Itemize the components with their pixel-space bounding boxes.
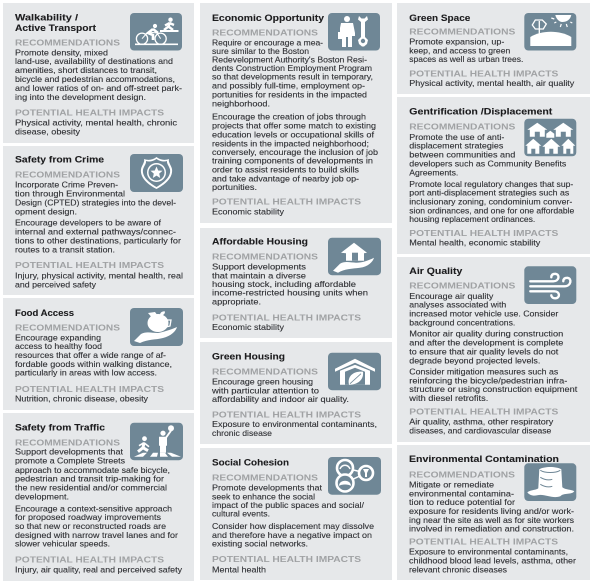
heading: green housing: Green Housing (212, 351, 285, 362)
recommendations text (15, 332, 172, 378)
recommendations text: portunities. (212, 182, 257, 192)
potential health impacts label: POTENTIAL HEALTH IMPACTS (409, 408, 558, 417)
panel: gentrification / displacement (397, 97, 590, 254)
heading: food access: Food Access (15, 308, 74, 319)
recommendations text (212, 37, 378, 192)
recommendations text: spaces as well as urban trees. (409, 54, 523, 64)
recommendations text (15, 179, 181, 254)
recommendations text: Consider how displacement may dissolve (212, 521, 374, 531)
recommendations text: projects that offer some match to existing (212, 120, 376, 130)
recommendations text: displacement strategies (409, 141, 503, 151)
recommendations text: involved in remediation and construction. (409, 524, 574, 534)
recommendations text: tions to other destinations, particularly for (15, 236, 181, 246)
impacts text: childhood blood lead levels, asthma, other (409, 555, 576, 565)
recommendations text: Redevelopment Authority's Boston Resi- (212, 54, 367, 64)
icon: police badge (130, 154, 183, 192)
recommendations label: RECOMMENDATIONS (409, 282, 515, 291)
recommendations text: amenities, short distances to transit, (15, 65, 157, 75)
recommendations label: RECOMMENDATIONS (409, 123, 515, 132)
recommendations text: structure or using construction equipment (409, 384, 578, 394)
panel: safety from crime (3, 146, 194, 295)
recommendations label: RECOMMENDATIONS (15, 39, 120, 48)
recommendations text (212, 261, 368, 307)
recommendations text: Promote developments that (212, 483, 323, 493)
icon: cluster of houses (524, 119, 576, 156)
recommendations text: ing into the development design. (15, 92, 146, 102)
recommendations text: education levels or occupational skills of (212, 129, 375, 139)
heading: gentrification / displacement: Gentrification /Displacement (409, 107, 553, 118)
recommendations text: Encourage the creation of jobs through (212, 111, 366, 121)
panel: food access (3, 298, 194, 410)
potential health impacts label: POTENTIAL HEALTH IMPACTS (409, 229, 558, 238)
recommendations text: residents in the impacted neighborhood; (212, 138, 369, 148)
impacts text: relevant chronic diseases (409, 564, 507, 574)
recommendations text: Encourage air quality (409, 291, 494, 301)
recommendations text: environmental contamina- (409, 488, 514, 498)
recommendations label: RECOMMENDATIONS (15, 324, 120, 333)
recommendations text: Design (CPTED) strategies into the devel- (15, 197, 176, 207)
recommendations text: existing social networks. (212, 539, 308, 549)
impacts text: Mental health (212, 564, 266, 574)
impacts text: Air quality, asthma, other respiratory (409, 417, 554, 427)
recommendations text: to ensure that air quality levels do not (409, 347, 559, 357)
recommendations text: tion to reduce potential for (409, 497, 515, 507)
heading: walkability (15, 12, 97, 34)
recommendations text: Promote local regulatory changes that sup- (409, 179, 574, 189)
recommendations label: RECOMMENDATIONS (15, 438, 120, 447)
recommendations text: resources that offer a wide range of af- (15, 350, 166, 360)
recommendations text: with particular attention to (211, 385, 319, 395)
impacts text: Exposure to environmental contaminants, (409, 546, 568, 556)
recommendations text: Require or encourage a mea- (212, 37, 323, 47)
recommendations text: Support developments that (15, 447, 124, 457)
potential health impacts label: POTENTIAL HEALTH IMPACTS (409, 69, 558, 78)
potential health impacts label: POTENTIAL HEALTH IMPACTS (15, 555, 164, 564)
recommendations text: degrade beyond projected levels. (409, 355, 540, 365)
heading: air quality: Air Quality (409, 266, 463, 277)
recommendations text: dents Construction Employment Program (212, 63, 372, 73)
impacts text: Exposure to environmental contaminants, (212, 419, 377, 429)
potential health impacts label: POTENTIAL HEALTH IMPACTS (15, 261, 164, 270)
recommendations text: reinforcing the bicycle/pedestrian infra- (409, 375, 568, 385)
impacts text: Economic stability (212, 322, 285, 332)
panel: walkability / active transport (3, 3, 194, 143)
recommendations text: routes to a transit station. (15, 244, 115, 254)
panel: air quality (397, 257, 590, 442)
impacts text: Economic stability (212, 206, 285, 216)
recommendations text (409, 132, 575, 224)
recommendations text: background concentrations. (409, 317, 515, 327)
recommendations text: so that developments result in temporary, (212, 72, 373, 82)
icon: cyclist and pedestrian (130, 13, 182, 50)
recommendations text: seek to enhance the social (212, 491, 315, 501)
potential health impacts label: POTENTIAL HEALTH IMPACTS (212, 313, 361, 322)
icon: wind (524, 266, 576, 304)
recommendations text: and possibly full-time, employment op- (212, 81, 365, 91)
recommendations text: conversely, encourage the inclusion of job (212, 147, 378, 157)
panel: green space (397, 3, 590, 94)
recommendations text (212, 483, 374, 549)
icon: leaking barrel (524, 463, 576, 501)
recommendations text: portunities for residents in the impacted (212, 90, 367, 100)
icon: connected social circles (328, 457, 381, 495)
impacts text: diseases, and cardiovascular disease (409, 426, 552, 436)
recommendations text (409, 480, 574, 534)
impacts text (15, 118, 177, 136)
icon: apple in hand (130, 308, 183, 346)
recommendations text: sure similar to the Boston (212, 46, 309, 56)
recommendations text: Agreements. (409, 167, 458, 177)
impacts text: disease, obesity (15, 126, 81, 136)
recommendations text: and lower ratios of on- and off-street park- (15, 83, 182, 93)
icon: green house with leaf (328, 353, 381, 390)
recommendations text: slower vehicular speeds. (15, 539, 110, 549)
recommendations text: Encourage green housing (212, 377, 313, 387)
recommendations label: RECOMMENDATIONS (15, 171, 120, 180)
impacts text (409, 417, 554, 436)
impacts text: Nutrition, chronic disease, obesity (15, 393, 149, 403)
panel: affordable housing (200, 228, 392, 338)
recommendations text: Promote the use of anti- (409, 132, 505, 142)
recommendations label: RECOMMENDATIONS (212, 367, 318, 376)
heading: economic opportunity: Economic Opportunity (212, 13, 325, 24)
recommendations label: RECOMMENDATIONS (212, 252, 318, 261)
recommendations text: designed with narrow travel lanes and for (15, 530, 178, 540)
recommendations text: developers such as Community Benefits (409, 159, 566, 169)
heading: green space: Green Space (409, 13, 470, 24)
recommendations text (211, 377, 349, 404)
impacts text: Injury, physical activity, mental health, real (15, 271, 183, 281)
recommendations text: development. (15, 492, 69, 502)
heading: affordable housing: Affordable Housing (212, 237, 308, 248)
heading: environmental contamination: Environmental Contamination (409, 454, 559, 465)
potential health impacts label: POTENTIAL HEALTH IMPACTS (15, 385, 164, 394)
recommendations text: that maintain a diverse (212, 270, 306, 280)
panel: economic opportunity (200, 3, 392, 223)
recommendations text: Promote expansion, up- (409, 36, 505, 46)
recommendations label: RECOMMENDATIONS (409, 27, 515, 36)
heading: walkability: Active Transport (15, 23, 97, 34)
icon: house in hand (328, 238, 381, 275)
recommendations text: between communities and (409, 150, 516, 160)
recommendations text: Encourage expanding (15, 332, 101, 342)
recommendations text: Support developments (212, 261, 306, 271)
recommendations text: and therefore have a negative impact on (212, 530, 372, 540)
recommendations text: housing replacement ordinances. (409, 214, 535, 224)
potential health impacts label: POTENTIAL HEALTH IMPACTS (212, 411, 361, 420)
recommendations text: with diesel retrofits. (408, 393, 488, 403)
recommendations text: and after the development is complete (409, 338, 564, 348)
recommendations text: access to healthy food (15, 341, 102, 351)
recommendations text: Encourage a context-sensitive approach (15, 503, 172, 513)
impacts text: chronic disease (212, 428, 272, 438)
recommendations label: RECOMMENDATIONS (409, 470, 515, 479)
recommendations text: cultural events. (212, 509, 270, 519)
recommendations text: keep, and access to green (409, 45, 511, 55)
potential health impacts label: POTENTIAL HEALTH IMPACTS (212, 555, 361, 564)
impacts text (212, 419, 377, 438)
recommendations text (15, 47, 182, 102)
icon: pedestrians at crosswalk (130, 423, 183, 460)
recommendations text: particularly in areas with low access. (15, 368, 157, 378)
recommendations text (408, 291, 578, 403)
potential health impacts label: POTENTIAL HEALTH IMPACTS (409, 538, 558, 547)
impacts text (409, 546, 576, 574)
recommendations text: land-use, availability of destinations and (15, 56, 173, 66)
impacts text: Physical activity, mental health, air quality (409, 78, 575, 88)
recommendations text: Monitor air quality during construction (409, 329, 564, 339)
recommendations text: Promote density, mixed (15, 47, 108, 57)
recommendations text: fordable goods within walking distance, (15, 359, 172, 369)
heading: walkability: Walkability / (15, 12, 78, 24)
recommendations text: inclusionary zoning, condominium conver- (409, 196, 573, 206)
potential health impacts label: POTENTIAL HEALTH IMPACTS (212, 198, 361, 207)
recommendations text: the new residential and/or commercial (15, 483, 167, 493)
recommendations text: appropriate. (212, 297, 261, 307)
icon: park with tree and sun (524, 13, 576, 50)
recommendations text: for proposed roadway improvements (15, 512, 161, 522)
recommendations text: ing near the site as well as for site workers (409, 515, 574, 525)
impacts text: and perceived safety (15, 279, 97, 289)
heading: social cohesion: Social Cohesion (212, 458, 289, 469)
panel: social cohesion (200, 448, 392, 580)
recommendations text (15, 447, 178, 549)
recommendations text: and take advantage of nearby job op- (212, 173, 359, 183)
recommendations text: analyses associated with (409, 300, 507, 310)
recommendations text: order to assist residents to build skills (212, 164, 359, 174)
heading: safety from crime: Safety from Crime (15, 155, 104, 166)
recommendations text: approach to accommodate safe bicycle, (15, 465, 170, 475)
recommendations text: opment design. (15, 206, 77, 216)
recommendations label: RECOMMENDATIONS (212, 28, 318, 37)
panel: green housing (200, 342, 392, 444)
panel: safety from traffic (3, 413, 194, 581)
impacts text: Mental health, economic stability (409, 238, 541, 248)
recommendations text: promote a Complete Streets (15, 456, 125, 466)
impacts text: Injury, air quality, real and perceived safety (15, 564, 183, 574)
icon: worker with wrench (328, 13, 380, 50)
recommendations text: pedestrian and transit trip-making for (15, 474, 164, 484)
recommendations text: bicycle and pedestrian accommodations, (15, 74, 175, 84)
recommendations text: Encourage developers to be aware of (15, 218, 162, 228)
impacts text: Physical activity, mental health, chronic (15, 118, 177, 128)
recommendations text: affordability and indoor air quality. (212, 394, 349, 404)
recommendations text: training components of developments in (212, 156, 373, 166)
recommendations text: sion ordinances, and one for one affordable (409, 205, 575, 215)
recommendations text: internal and external pathways/connec- (15, 227, 176, 237)
recommendations text: income-restricted housing units when (212, 288, 368, 298)
recommendations text: so that new or reconstructed roads are (15, 521, 166, 531)
potential health impacts label: POTENTIAL HEALTH IMPACTS (15, 108, 164, 118)
recommendations text (409, 36, 523, 64)
recommendations text: exposure for residents living and/or work- (409, 506, 574, 516)
heading: safety from traffic: Safety from Traffic (15, 423, 106, 434)
recommendations text: neighborhood. (212, 99, 270, 109)
recommendations text: housing stock, including affordable (212, 279, 356, 289)
recommendations text: Consider mitigation measures such as (409, 367, 558, 377)
recommendations label: RECOMMENDATIONS (212, 473, 318, 482)
recommendations text: port anti-displacement strategies such as (409, 188, 569, 198)
recommendations text: increased motor vehicle use. Consider (409, 309, 559, 319)
recommendations text: tion through Environmental (15, 188, 125, 198)
impacts text (15, 271, 183, 289)
recommendations text: Incorporate Crime Preven- (15, 179, 118, 189)
recommendations text: Mitigate or remediate (409, 480, 494, 490)
panel: environmental contamination (397, 445, 590, 580)
recommendations text: impact of the public spaces and social/ (212, 500, 365, 510)
